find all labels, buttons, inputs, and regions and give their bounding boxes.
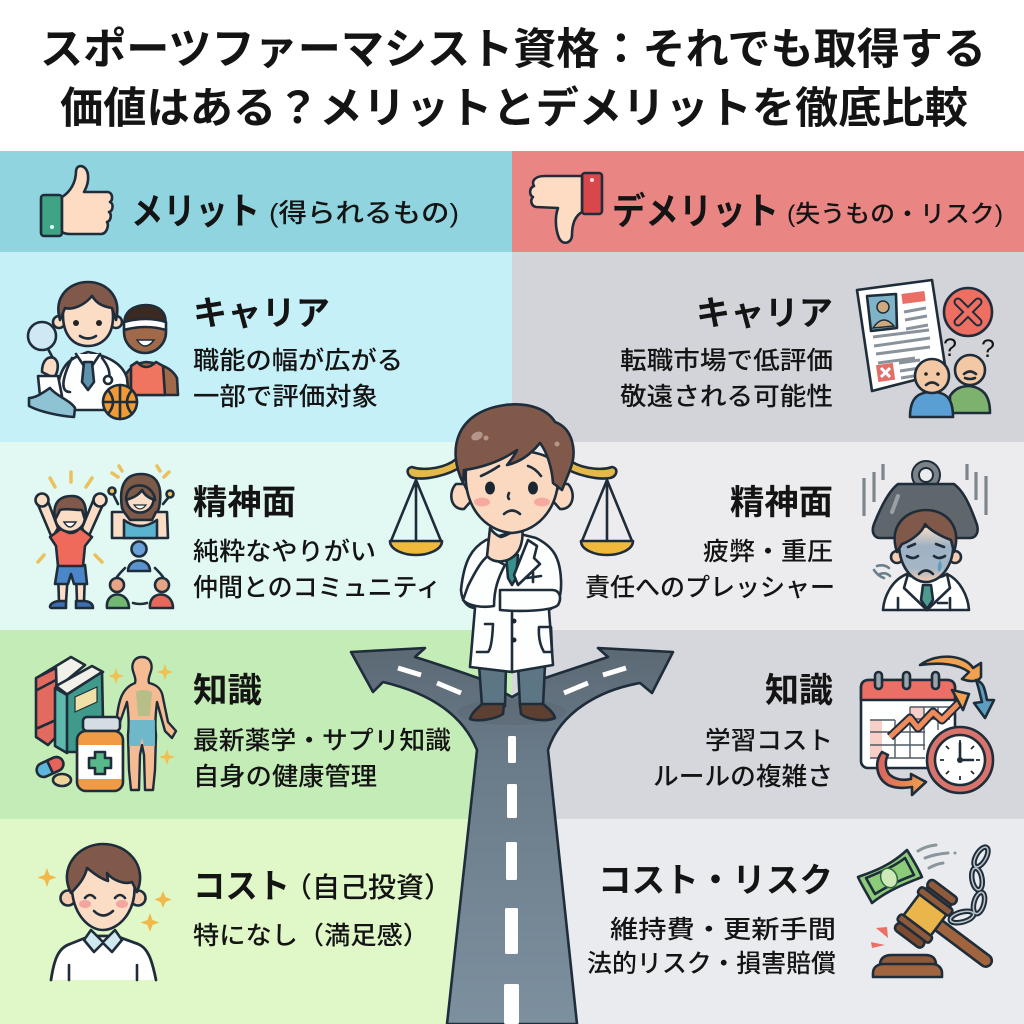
demerit knowledge text: ルールの複雑さ — [653, 763, 833, 791]
icon: thumbs down — [530, 173, 602, 243]
merit cost text: 特になし（満足感） — [193, 922, 429, 950]
scale arms and pans — [390, 456, 633, 555]
merit cost text — [193, 868, 452, 950]
face — [466, 450, 558, 533]
icon: smiling person with sparkles — [38, 844, 172, 980]
merit heading — [131, 191, 459, 232]
demerit knowledge text: 学習コスト — [705, 727, 833, 755]
merit knowledge text: 知識 — [193, 672, 262, 710]
demerit mental text: 疲弊・重圧 — [703, 538, 833, 566]
merit mental text — [193, 484, 441, 602]
demerit heading: デメリット — [612, 190, 779, 232]
icon: doctor and athlete — [28, 282, 178, 419]
demerit mental text — [585, 484, 835, 602]
icon: calendar, chart, clock and arrows — [861, 657, 994, 795]
demerit row career — [512, 252, 1024, 442]
icon: resume with rejection mark and worried people: ? — [981, 335, 995, 363]
icon: person under heavy weight — [864, 464, 986, 610]
merit career text — [193, 295, 403, 411]
merit career text: 一部で評価対象 — [193, 383, 378, 411]
eyes, brows, nose and mouth — [481, 466, 541, 476]
icon: resume with rejection mark and worried people — [857, 280, 995, 417]
hair — [456, 404, 574, 490]
merit heading: (得られるもの) — [269, 198, 459, 228]
demerit cost text: コスト・リスク — [598, 862, 833, 900]
merit header band — [0, 151, 512, 252]
demerit row mental — [512, 442, 1024, 630]
folded arm — [500, 590, 560, 611]
merit knowledge text: 自身の健康管理 — [193, 763, 377, 791]
icon: money, chain and gavel — [858, 845, 1010, 988]
merit row cost — [0, 819, 512, 1024]
merit knowledge text — [193, 672, 451, 791]
merit mental text: 純粋なやりがい — [193, 538, 376, 566]
forearm — [463, 556, 505, 607]
merit row knowledge — [0, 630, 512, 819]
demerit cost text — [587, 862, 836, 978]
merit cost text: コスト — [193, 868, 290, 906]
icon: thumbs up — [41, 166, 113, 236]
merit row career — [0, 252, 512, 442]
demerit knowledge text — [653, 672, 833, 791]
icon: books, supplement bottle, body and pills — [34, 657, 176, 791]
demerit career text: キャリア — [696, 295, 833, 333]
icon: cheering people and community — [36, 466, 174, 608]
demerit mental text: 精神面 — [730, 484, 833, 522]
merit career text: 職能の幅が広がる — [193, 347, 403, 375]
demerit heading — [612, 190, 1003, 232]
demerit knowledge text: 知識 — [765, 672, 833, 710]
merit cost text: （自己投資） — [284, 872, 452, 903]
demerit career text — [620, 295, 833, 411]
demerit header band — [512, 151, 1024, 252]
merit heading: メリット — [131, 191, 260, 232]
icon: resume with rejection mark and worried people: ? — [943, 334, 957, 362]
demerit mental text: 責任へのプレッシャー — [585, 574, 835, 602]
demerit cost text: 法的リスク・損害賠償 — [587, 950, 836, 978]
hand on chin — [487, 527, 523, 561]
panel: merit column — [0, 151, 512, 1024]
merit mental text: 仲間とのコミュニティ — [193, 574, 441, 602]
demerit cost text: 維持費・更新手間 — [610, 916, 836, 944]
tie and collar — [506, 555, 518, 585]
title: 価値はある？メリットとデメリットを徹底比較 — [60, 84, 968, 133]
merit mental text: 精神面 — [193, 484, 296, 522]
title: スポーツファーマシスト資格：それでも取得する — [40, 26, 986, 74]
merit knowledge text: 最新薬学・サプリ知識 — [193, 727, 451, 755]
pharmacist character with balance scale — [390, 404, 633, 720]
demerit career text: 転職市場で低評価 — [620, 347, 833, 375]
legs and shoes — [479, 665, 545, 706]
title — [40, 26, 986, 133]
merit career text: キャリア — [193, 295, 330, 333]
lab coat — [461, 532, 561, 672]
demerit row knowledge — [512, 630, 1024, 819]
merit row mental — [0, 442, 512, 630]
ears — [451, 484, 573, 509]
demerit career text: 敬遠される可能性 — [620, 383, 833, 411]
panel: demerit column — [512, 151, 1024, 1024]
demerit heading: (失うもの・リスク) — [787, 201, 1003, 228]
road with forked arrows — [351, 648, 673, 1024]
demerit row cost — [512, 819, 1024, 1024]
